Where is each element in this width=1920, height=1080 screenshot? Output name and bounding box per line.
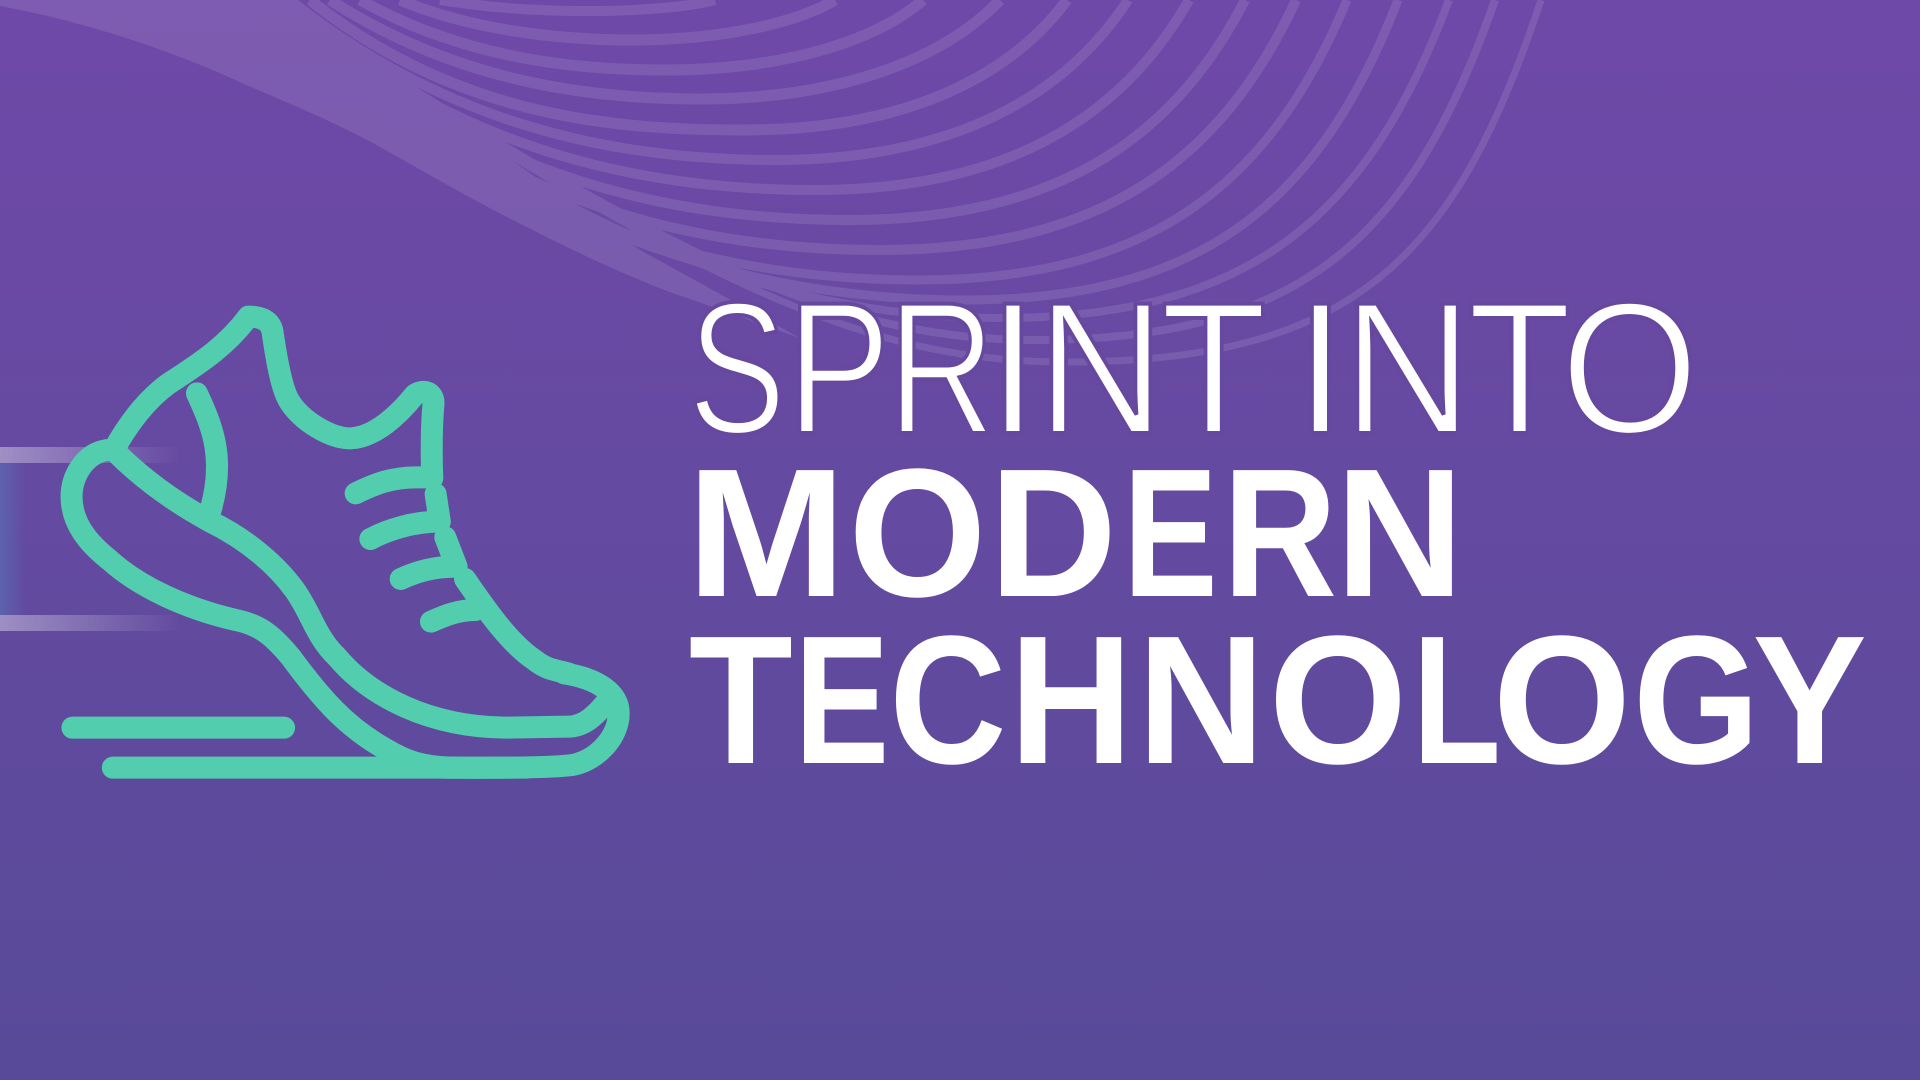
wave band <box>0 0 800 338</box>
title line 3: L <box>1412 597 1501 802</box>
title line 1: T <box>1160 263 1264 473</box>
outsole <box>72 450 455 768</box>
title line 3: N <box>1137 597 1265 802</box>
title line 1: I <box>1295 263 1346 473</box>
lace 3 <box>401 537 457 579</box>
outer toe <box>442 673 619 768</box>
midsole line <box>114 450 608 728</box>
heel tab <box>197 393 217 515</box>
title line 1: N <box>1343 263 1472 473</box>
title line 3: Y <box>1752 597 1867 802</box>
title line 2: M <box>686 430 846 635</box>
title line 1: T <box>1468 263 1571 473</box>
lace 2 <box>370 494 440 539</box>
title line 2: R <box>1223 430 1337 635</box>
title line 1: I <box>988 263 1038 473</box>
title line 2: O <box>848 430 986 635</box>
icon: running shoe <box>72 317 619 768</box>
shoe upper <box>114 317 434 478</box>
ground line 2 <box>113 757 526 779</box>
title <box>686 263 1867 802</box>
title line 1: S <box>688 263 786 473</box>
title line 3: O <box>1493 597 1631 802</box>
title line 3: O <box>1269 597 1407 802</box>
title line 2: E <box>1123 430 1218 635</box>
title line 1: R <box>888 263 995 473</box>
ground line 1 <box>72 717 284 739</box>
wave graphic <box>0 0 1541 362</box>
title line 3: H <box>1009 597 1133 802</box>
title line 1: O <box>1560 263 1699 473</box>
title line 3: G <box>1633 597 1760 802</box>
title line 2: N <box>1335 430 1464 635</box>
title line 3: E <box>794 597 889 802</box>
motion streaks <box>0 447 182 631</box>
toe box and lace 4 <box>431 579 568 673</box>
title line 2: D <box>989 430 1117 635</box>
title line 1: P <box>787 263 891 473</box>
title line 3: T <box>689 597 793 802</box>
title line 3: C <box>889 597 1006 802</box>
lace 1 <box>356 477 432 493</box>
title line 1: N <box>1037 263 1165 473</box>
concentric curves <box>266 0 1541 362</box>
